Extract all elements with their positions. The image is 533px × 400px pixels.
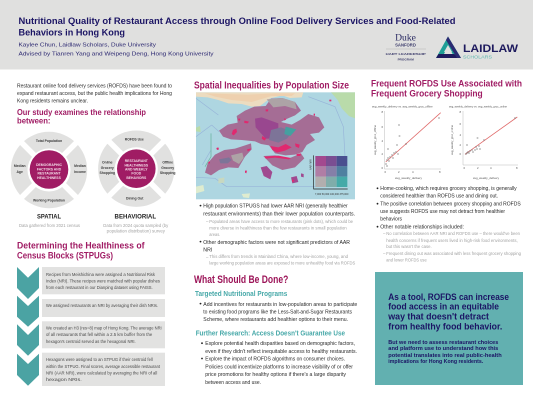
- step 4: Hexagons were assigned to an STPUG if their centroid fell: [46, 357, 153, 362]
- scatter chart: offline grocery: 4: [412, 170, 414, 174]
- research bullets: [201, 341, 357, 386]
- scatter chart: online grocery: avg_weekly_delivery vs. avg_weekly_groc_online: [449, 105, 507, 109]
- heading: our study: Our study examines the relationship: [17, 107, 146, 117]
- scatter chart: online grocery: 0: [464, 166, 466, 170]
- header band: [0, 0, 533, 70]
- scatter chart: online grocery: 4: [460, 133, 462, 137]
- diagram: spatial: HEALTHINESS: [37, 176, 62, 180]
- scatter chart: offline grocery: 6: [382, 125, 384, 129]
- diagram: behavioral: Shopping: [99, 171, 115, 175]
- step 4: hexagon NRIs.: [46, 377, 82, 382]
- scatter chart: offline grocery: 2: [398, 170, 400, 174]
- conclusion detail: potential translates into real public-health: [388, 353, 502, 359]
- intro text: Kong residents remains unclear.: [17, 99, 88, 105]
- step 1: from each restaurant in our Dianping dataset using FAISS.: [46, 285, 153, 290]
- diagram: behavioral: Shopping: [160, 171, 176, 175]
- scatter chart: offline grocery: 0: [382, 166, 384, 170]
- scatter chart: online grocery: 0: [460, 152, 462, 156]
- logo: Duke Sanford: SANFORD: [395, 43, 416, 48]
- label: behavioral: Data from 2024 quota sampled (by: [103, 223, 169, 228]
- logo: Duke Sanford: Duke: [395, 32, 416, 44]
- conclusion headline: [387, 292, 509, 331]
- scatter chart: offline grocery: [372, 105, 441, 180]
- diagram: behavioral: Grocery: [161, 166, 174, 170]
- scatter chart: offline grocery: avg_weekly_delivery: [395, 176, 423, 180]
- diagram: behavioral: Offline: [162, 160, 173, 164]
- diagram: spatial: Median: [14, 164, 26, 168]
- spatial bullets: more diverse in healthiness than the few restaurants in small population: [209, 226, 347, 231]
- diagram: spatial: RESTAURANT: [37, 172, 61, 176]
- grocery bullets: Frequent dining out was associated with less frequent grocery shopping: [386, 251, 522, 256]
- conclusion detail: But we need to assess restaurant choices: [388, 340, 499, 346]
- subheading: targeted programs: Targeted Nutritional Programs: [195, 291, 287, 298]
- grocery bullets: No correlation between AAR NRI and ROFDS use – there would've been: [386, 231, 521, 236]
- diagram: behavioral: Dining Out: [126, 196, 144, 200]
- heading: frequent ROFDS: [371, 78, 522, 98]
- intro text: Restaurant online food delivery services (ROFDS) have been found to: [17, 83, 172, 89]
- conclusion headline: food access in an equitable: [388, 302, 499, 312]
- scatter chart: online grocery: [449, 105, 518, 180]
- heading: determining: Determining the Healthiness of: [17, 240, 145, 250]
- step 4: within the STPUG. Final scores, average accessible restaurant: [46, 364, 161, 369]
- intro text: [17, 83, 172, 105]
- targeted bullets: [200, 302, 357, 323]
- spatial bullets: areas.: [209, 232, 220, 237]
- grocery bullets: behaviors: [380, 217, 402, 223]
- spatial bullets: restaurant environments) than their lower population counterparts.: [203, 211, 355, 217]
- research bullets: Explore potential health disparities based on demographic factors,: [205, 341, 355, 347]
- logo: Duke Sanford: PROGRAM: [398, 58, 414, 62]
- scatter chart: offline grocery: avg_weekly_delivery vs. avg_weekly_groc_offline: [372, 105, 433, 109]
- title: Nutritional Quality of Restaurant Access through Online Food Delivery Services and Food-Related: [18, 16, 456, 26]
- heading: determining: [17, 240, 145, 260]
- step 2: We assigned restaurants an NRI by averaging their dish NRIs.: [46, 303, 158, 308]
- logo: Laidlaw Scholars: LAIDLAW: [463, 43, 518, 55]
- spatial bullets: High population STPUGS had lower AAR NRI (generally healthier: [203, 204, 348, 210]
- label: behavioral: BEHAVIORIAL: [115, 214, 156, 221]
- spatial bullets: Populated areas have access to more restaurants (pink dots), which could be: [209, 219, 354, 224]
- conclusion detail: and platform use to understand how this: [388, 346, 499, 352]
- targeted bullets: to existing food programs like the Less-Salt-and-Sugar Restaurants: [203, 309, 352, 315]
- intro text: expand restaurant access, but the public health implications for Hong: [17, 91, 172, 97]
- diagram: spatial: DEMOGRAPHIC: [36, 163, 62, 167]
- legend: 7,000 50,000 100,000 375,000: [315, 194, 349, 196]
- authors: [18, 43, 214, 58]
- research bullets: price promotions for healthy options if there's a large disparity: [205, 372, 346, 378]
- conclusion panel: [375, 272, 523, 385]
- logo: Duke Sanford: [386, 32, 426, 62]
- diagram: behavioral: [98, 130, 176, 207]
- diagram: spatial: Working Population: [33, 198, 65, 202]
- scatter chart: online grocery: 8: [516, 166, 518, 170]
- spatial bullets: [200, 204, 355, 266]
- conclusion headline: from healthy food behavior.: [388, 321, 502, 331]
- heading: what should be done: What Should Be Done?: [194, 274, 288, 286]
- diagram: behavioral: FOOD: [131, 172, 142, 176]
- scatter chart: online grocery: 6: [460, 122, 462, 126]
- scatter chart: online grocery: 8: [460, 110, 462, 114]
- targeted bullets: Scheme, where restaurants add healthier options to their menu.: [203, 317, 348, 323]
- step 4: NRI (AAR NRI), were calculated by averaging the NRI of all: [46, 370, 157, 376]
- step 3: [42, 321, 165, 348]
- spatial bullets: This differs from trends in Mainland China, where low-income, young, and: [209, 254, 349, 259]
- authors: Advised by Tianren Yang and Weipeng Deng, Hong Kong University: [18, 52, 214, 58]
- diagram: spatial: Income: [74, 170, 86, 174]
- grocery bullets: The positive correlation between grocery shopping and ROFDS: [380, 202, 521, 208]
- conclusion headline: way that doesn't detract: [387, 312, 489, 322]
- legend: AAR NRI: [309, 159, 313, 170]
- conclusion detail: [388, 340, 502, 365]
- legend: [309, 155, 349, 196]
- logo: Laidlaw Scholars: [436, 36, 518, 59]
- step 3: We created an H3 (res=8) map of Hong Kong. The average NRI: [46, 326, 162, 330]
- grocery bullets: health concerns if frequent users lived in high-risk food environments,: [386, 238, 518, 243]
- diagram: behavioral: Online: [102, 160, 113, 164]
- heading: spatial inequalities: Spatial Inequalities by Population Size: [194, 80, 349, 91]
- scatter chart: online grocery: 4: [490, 166, 492, 170]
- conclusion headline: As a tool, ROFDS can increase: [388, 292, 509, 302]
- heading: frequent ROFDS: Frequent ROFDS Use Associated with: [371, 78, 522, 88]
- grocery bullets: use suggests ROFDS use may not detract from healthier: [380, 209, 505, 215]
- chevrons: [17, 267, 39, 386]
- scatter chart: offline grocery: avg_weekly_groc_offline: [373, 125, 377, 155]
- title: [18, 16, 456, 37]
- label: spatial: Data gathered from 2021 census: [19, 223, 80, 228]
- scatter chart: online grocery: 2: [477, 166, 479, 170]
- step 1: Recipes from Meishichina were assigned a Nutritional Risk: [46, 272, 156, 277]
- diagram: behavioral: ROFDS Use: [125, 138, 144, 142]
- grocery bullets: but this wasn't the case.: [386, 244, 432, 249]
- grocery bullets: considered healthier than ROFDS use and dining out.: [380, 193, 498, 199]
- diagram: behavioral: RESTAURANT: [125, 159, 149, 163]
- scatter chart: offline grocery: 4: [382, 139, 384, 143]
- research bullets: even if they didn't reflect inequitable access to healthy restaurants.: [205, 349, 357, 355]
- label: behavioral: [103, 214, 169, 234]
- grocery bullets: Home-cooking, which requires grocery shopping, is generally: [380, 186, 517, 192]
- subheading: further research: Further Research: Access Doesn't Guarantee Use: [196, 330, 345, 337]
- diagram: spatial: FACTORS AND: [37, 167, 62, 171]
- spatial bullets: –: [206, 255, 209, 260]
- research bullets: between access and use.: [205, 380, 261, 386]
- step 1: Index (NRI). These recipes were matched with popular dishes: [46, 278, 161, 283]
- title: Behaviors in Hong Kong: [18, 27, 125, 37]
- Lantau and outlying islands: [205, 143, 252, 175]
- label: behavioral: population distribution) survey: [107, 229, 166, 234]
- diagram: behavioral: BEHAVIORS: [126, 176, 147, 180]
- grocery bullets: [377, 186, 522, 262]
- restaurant dots: [208, 100, 331, 182]
- New Territories and Kowloon: [219, 98, 324, 155]
- diagram: spatial: Total Population: [36, 139, 62, 143]
- spatial bullets: Other demographic factors were not significant predictors of AAR: [203, 240, 350, 246]
- scatter chart: online grocery: 2: [460, 143, 462, 147]
- grocery bullets: and lower ROFDS use: [386, 258, 427, 262]
- scatter chart: online grocery: avg_weekly_delivery: [473, 176, 500, 180]
- heading: our study: between:: [17, 115, 50, 125]
- targeted bullets: Add incentives for restaurants in low-population areas to participate: [203, 302, 357, 308]
- diagram: spatial: Age: [16, 170, 23, 174]
- spatial bullets: –: [206, 219, 209, 224]
- grocery bullets: Other notable relationships included:: [380, 225, 464, 231]
- research bullets: Explore the impact of ROFDS algorithms on consumer choices.: [205, 357, 345, 363]
- scatter chart: offline grocery: 8: [382, 110, 384, 114]
- diagram: behavioral: HEALTHINESS: [124, 164, 149, 168]
- label: spatial: [19, 214, 80, 228]
- spatial bullets: large working population areas are exposed to more unhealthy food via ROFDS: [209, 261, 355, 266]
- map of Hong Kong: [196, 92, 355, 200]
- step 3: of all restaurants that fell within a 2.5 km buffer from the: [46, 332, 153, 337]
- spatial bullets: NRI: [203, 247, 212, 253]
- scatter chart: offline grocery: 0: [384, 170, 386, 174]
- scatter chart: online grocery: avg_weekly_groc_online: [450, 125, 454, 155]
- authors: Kaylee Chun, Laidlaw Scholars, Duke University: [18, 43, 156, 49]
- step 3: hexagon's centroid served as the hexagonal NRI.: [46, 339, 136, 344]
- label: spatial: SPATIAL: [37, 214, 61, 221]
- grocery bullets: –: [383, 231, 386, 236]
- scatter chart: offline grocery: 2: [382, 152, 384, 156]
- diagram: behavioral: Grocery: [101, 166, 114, 170]
- diagram: behavioral: AND WEEKLY: [125, 168, 148, 172]
- heading: frequent ROFDS: Frequent Grocery Shopping: [371, 88, 483, 98]
- diagram: spatial: Median: [74, 164, 86, 168]
- heading: our study: [17, 107, 146, 125]
- research bullets: Policies could incentivize platforms to increase visibility of or offer: [205, 364, 353, 370]
- step 4: [42, 353, 165, 386]
- step 2: [42, 299, 165, 317]
- heading: determining: Census Blocks (STPUGs): [17, 250, 113, 260]
- logo: Laidlaw Scholars: SCHOLARS: [463, 54, 492, 59]
- scatter chart: offline grocery: 8: [439, 170, 441, 174]
- conclusion detail: implications for Hong Kong residents.: [388, 359, 484, 365]
- diagram: spatial: [11, 132, 87, 208]
- logo: Duke Sanford: HART LEADERSHIP: [386, 52, 426, 56]
- step 1: [42, 267, 165, 294]
- grocery bullets: –: [383, 251, 386, 256]
